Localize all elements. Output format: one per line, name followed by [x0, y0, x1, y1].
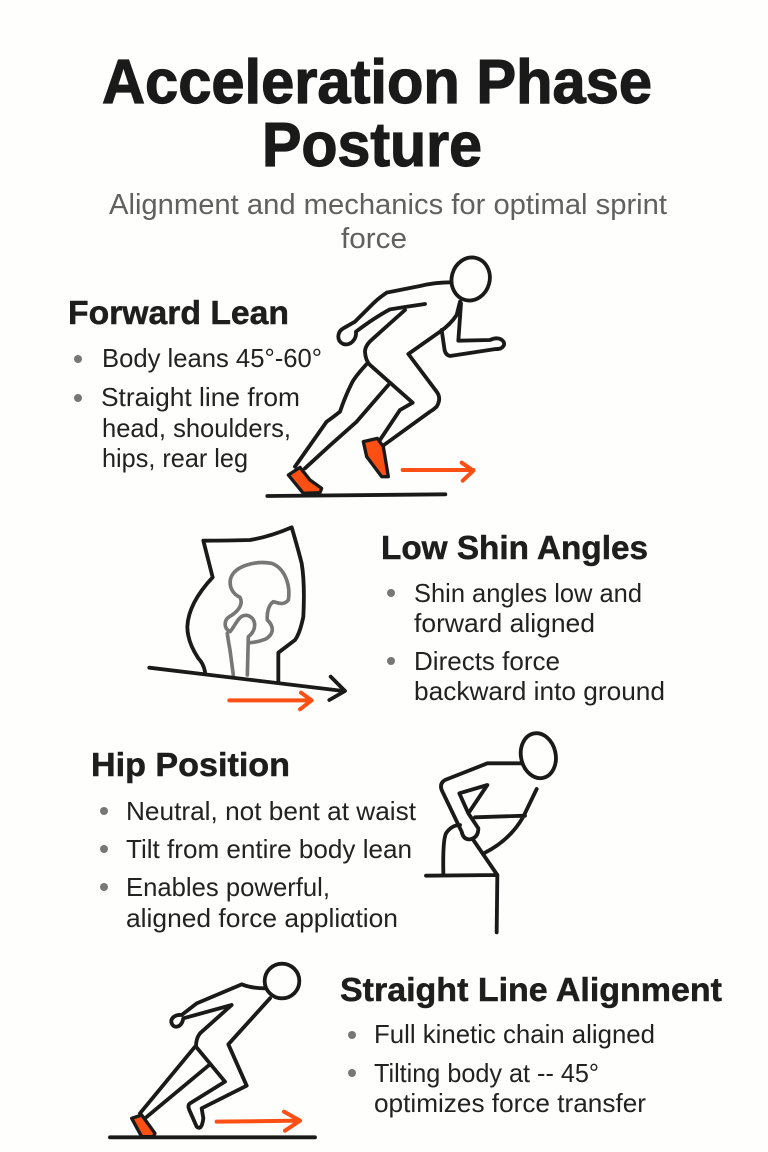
- bullet list: low shin angles: forward aligned: [414, 608, 595, 638]
- bullet list: forward lean: Straight line from: [101, 382, 300, 412]
- heading: low shin angles: Low Shin Angles: [381, 529, 648, 566]
- panel: hip position text: [91, 746, 417, 933]
- icon: rear foot: [132, 1115, 155, 1137]
- bullet list: hip position: Neutral, not bent at waist: [126, 796, 417, 826]
- panel: low shin angles text: [381, 529, 665, 706]
- bullet list: straight line alignment: [348, 1019, 655, 1118]
- bullet list: hip position: Tilt from entire body lean: [126, 834, 412, 864]
- icon: sprinter straight line: [110, 964, 315, 1137]
- ground line: [267, 494, 445, 496]
- arrow: force direction: [229, 693, 312, 709]
- arrow: forward direction: [403, 463, 473, 481]
- icon: hip and shin diagram: [149, 527, 345, 709]
- ground line: [110, 1132, 315, 1143]
- bullet list: straight line alignment: Tilting body at -- 45°: [374, 1058, 599, 1088]
- bullet list: forward lean: head, shoulders,: [102, 413, 291, 443]
- bullet list: straight line alignment: optimizes force transfer: [374, 1088, 646, 1118]
- panel: forward lean text: [68, 294, 322, 473]
- bullet list: forward lean: Body leans 45°-60°: [102, 343, 322, 373]
- bullet list: low shin angles: [387, 578, 665, 706]
- heading: forward lean: Forward Lean: [68, 294, 289, 331]
- heading: hip position: Hip Position: [91, 746, 290, 783]
- bullet list: forward lean: [74, 343, 322, 473]
- bullet list: low shin angles: Shin angles low and: [414, 578, 642, 608]
- icon: sprinter in forward lean: [267, 253, 504, 496]
- bullet list: hip position: Enables powerful,: [126, 872, 330, 902]
- ground slope arrow: [149, 668, 345, 700]
- arrow: forward direction: [217, 1112, 300, 1131]
- subtitle: force: [341, 223, 407, 255]
- icon: femur: [227, 633, 233, 675]
- title: Posture: [262, 111, 482, 180]
- bullet list: forward lean: hips, rear leg: [102, 443, 248, 473]
- bullet list: hip position: aligned force appliαtion: [126, 903, 398, 933]
- icon: hip hinge figure: [426, 730, 560, 932]
- icon: front foot: [363, 438, 388, 477]
- bullet list: hip position: [100, 796, 417, 933]
- bullet list: straight line alignment: Full kinetic chain aligned: [374, 1019, 655, 1049]
- subtitle: [109, 189, 667, 255]
- bullet list: low shin angles: Directs force: [414, 646, 560, 676]
- icon: pelvis bone: [225, 563, 289, 675]
- title: Acceleration Phase: [102, 48, 652, 117]
- title: [102, 48, 652, 180]
- heading: straight line alignment: Straight Line Alignment: [340, 971, 722, 1008]
- panel: straight line alignment text: [340, 971, 722, 1118]
- bullet list: low shin angles: backward into ground: [414, 676, 665, 706]
- icon: rear foot: [288, 467, 322, 493]
- subtitle: Alignment and mechanics for optimal sprint: [109, 189, 667, 221]
